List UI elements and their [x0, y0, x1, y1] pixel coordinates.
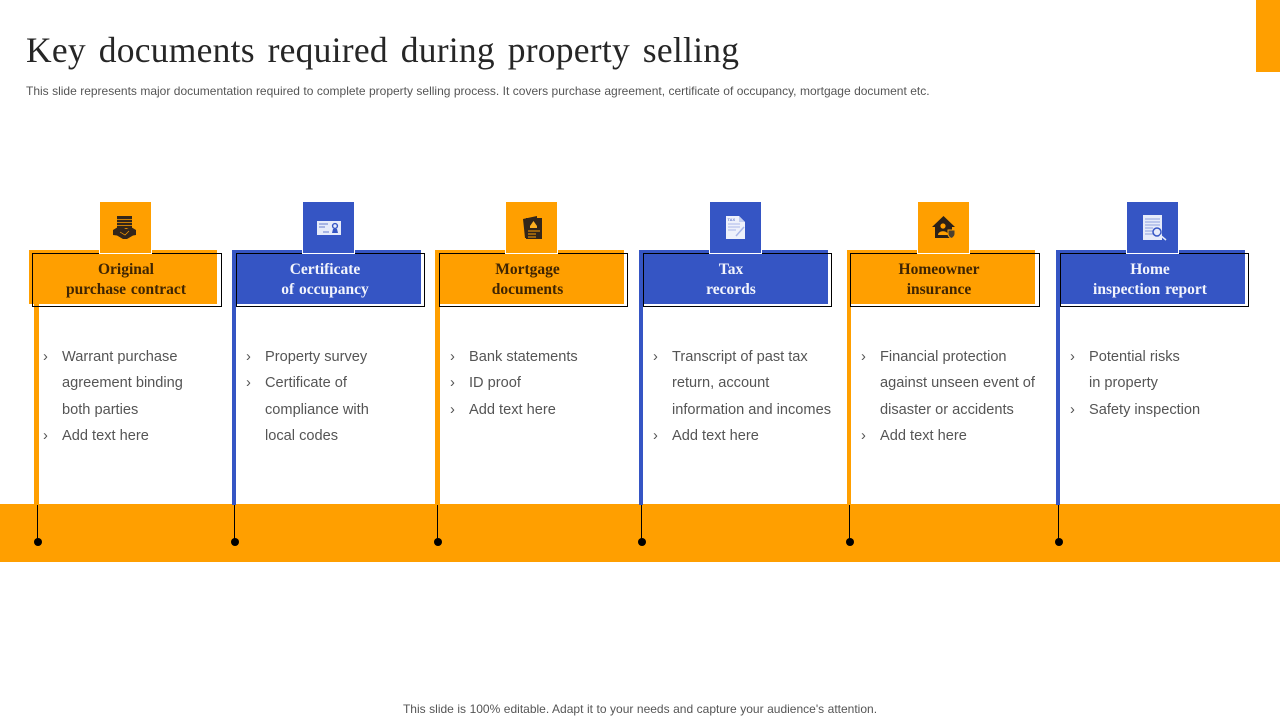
heading: Certificate: [290, 261, 360, 278]
heading: of occupancy: [281, 281, 369, 298]
text: ›: [246, 375, 251, 391]
bullet list: Certificate of: [265, 375, 347, 391]
bullet list: ID proof: [469, 375, 521, 391]
text: ›: [43, 428, 48, 444]
connector pin: [641, 505, 642, 542]
heading: [1093, 261, 1207, 298]
bullet list: Add text here: [469, 402, 556, 418]
timeline band: [0, 504, 1280, 562]
text: ›: [861, 349, 866, 365]
text: ›: [450, 375, 455, 391]
connector dot: [638, 538, 646, 546]
connector dot: [231, 538, 239, 546]
heading: [706, 261, 756, 298]
bullet list: [1070, 349, 1200, 418]
bullet list: [653, 349, 831, 444]
text: ›: [861, 428, 866, 444]
icon: inspection report: [1126, 202, 1179, 254]
bullet list: [246, 349, 369, 444]
text: ›: [1070, 402, 1075, 418]
bullet list: Property survey: [265, 349, 367, 365]
bullet list: return, account: [672, 375, 769, 391]
bullet list: Transcript of past tax: [672, 349, 808, 365]
heading: records: [706, 281, 756, 298]
card 3: mortgage documents: [434, 202, 628, 546]
icon: tax document: TAX: [728, 217, 736, 222]
bullet list: Potential risks: [1089, 349, 1180, 365]
bullet list: against unseen event of: [880, 375, 1035, 391]
connector pin: [1058, 505, 1059, 542]
heading: Homeowner: [899, 261, 979, 278]
bullet list: Financial protection: [880, 349, 1007, 365]
bullet list: Bank statements: [469, 349, 578, 365]
bullet list: [861, 349, 1035, 444]
heading: [898, 261, 980, 298]
heading: Original: [98, 261, 154, 278]
bullet list: Add text here: [62, 428, 149, 444]
bullet list: in property: [1089, 375, 1158, 391]
bullet list: disaster or accidents: [880, 402, 1014, 418]
card 4: tax records: [638, 202, 832, 546]
icon: insured house: [917, 202, 970, 254]
heading: inspection report: [1093, 281, 1207, 298]
text: ›: [43, 349, 48, 365]
connector pin: [849, 505, 850, 542]
connector dot: [1055, 538, 1063, 546]
bullet list: Warrant purchase: [62, 349, 177, 365]
text: ›: [450, 402, 455, 418]
card 6: home inspection report: [1055, 202, 1249, 546]
footer note: This slide is 100% editable. Adapt it to your needs and capture your audience's attention.: [403, 702, 877, 716]
bullet list: Safety inspection: [1089, 402, 1200, 418]
connector pin: [234, 505, 235, 542]
bullet list: [43, 349, 183, 444]
bullet list: [450, 349, 578, 418]
card 1: original purchase contract: [29, 202, 222, 546]
heading: [66, 261, 186, 298]
bullet list: compliance with: [265, 402, 369, 418]
connector pin: [37, 505, 38, 542]
bullet list: Add text here: [672, 428, 759, 444]
bullet list: both parties: [62, 402, 138, 418]
connector pin: [437, 505, 438, 542]
heading: Home: [1130, 261, 1170, 278]
connector dot: [434, 538, 442, 546]
heading: documents: [492, 281, 563, 298]
connector dot: [34, 538, 42, 546]
bullet list: local codes: [265, 428, 338, 444]
corner accent: [1256, 0, 1280, 72]
icon: mortgage papers: [505, 202, 558, 254]
icon: certificate: [302, 202, 355, 254]
text: ›: [450, 349, 455, 365]
heading: [281, 261, 369, 298]
heading: Mortgage: [495, 261, 560, 278]
text: ›: [653, 349, 658, 365]
text: ›: [1070, 349, 1075, 365]
card 2: certificate of occupancy: [231, 202, 425, 546]
bullet list: information and incomes: [672, 402, 831, 418]
icon: handshake contract: [99, 202, 152, 254]
heading: Tax: [719, 261, 743, 278]
bullet list: agreement binding: [62, 375, 183, 391]
heading: insurance: [907, 281, 971, 298]
bullet list: Add text here: [880, 428, 967, 444]
title: Key documents required during property selling: [26, 30, 739, 70]
connector dot: [846, 538, 854, 546]
icon: tax document: [709, 202, 762, 254]
heading: purchase contract: [66, 281, 186, 298]
text: ›: [653, 428, 658, 444]
subtitle: This slide represents major documentation required to complete property selling process. It covers purchase agreement, certificate of occupancy, mortgage document etc.: [26, 84, 930, 98]
text: ›: [246, 349, 251, 365]
card 5: homeowner insurance: [846, 202, 1040, 546]
heading: [492, 261, 563, 298]
